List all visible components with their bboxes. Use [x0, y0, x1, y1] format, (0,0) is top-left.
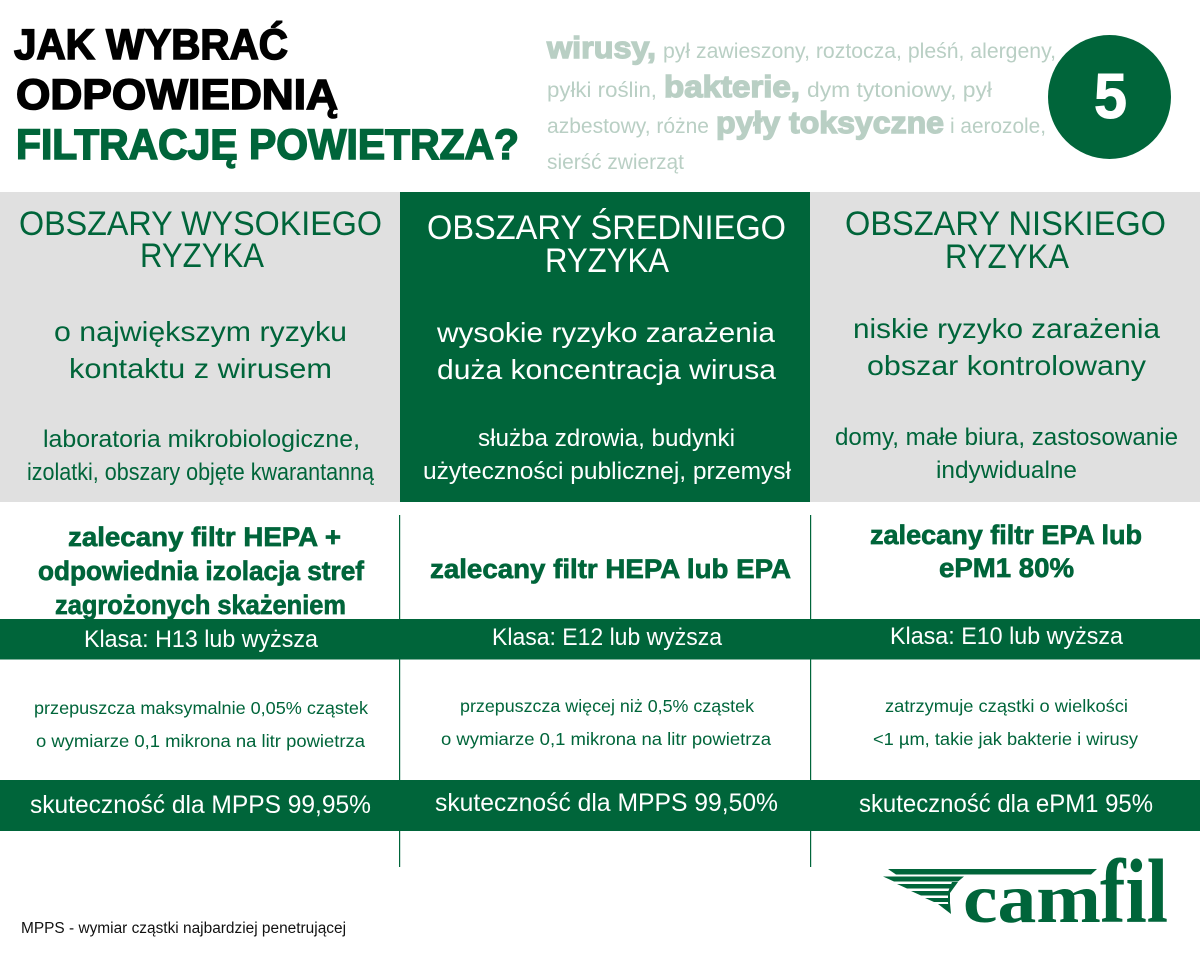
recommendation: high risk filter: zalecany filtr HEPA + [68, 522, 341, 552]
text: low risk filter properties: zatrzymuje cząstki o wielkości [885, 696, 1128, 716]
logo wordmark: cam [963, 861, 1101, 938]
recommendation: low risk filter: zalecany filtr EPA lub [870, 520, 1142, 550]
footnote: MPPS - wymiar cząstki najbardziej penetrującej [21, 920, 346, 937]
heading: medium risk [427, 208, 786, 280]
band: filter efficiency: skuteczność dla ePM1 95% [859, 790, 1153, 818]
text: low risk locations: indywidualne [936, 457, 1077, 484]
heading: medium risk: RYZYKA [545, 242, 669, 280]
recommendation: high risk filter [38, 522, 365, 620]
band: filter classes: Klasa: E12 lub wyższa [492, 624, 723, 651]
text: medium risk filter properties: przepuszcza więcej niż 0,5% cząstek [460, 696, 754, 716]
heading: low risk: OBSZARY NISKIEGO [845, 205, 1166, 243]
text: high risk locations: laboratoria mikrobiologiczne, [43, 426, 360, 453]
text: high risk locations: izolatki, obszary objęte kwarantanną [27, 459, 375, 486]
band: filter efficiency: skuteczność dla MPPS 99,50% [435, 789, 778, 817]
text block: airborne pollutants: pyłki roślin, [547, 79, 657, 102]
text: medium risk locations: służba zdrowia, budynki [478, 425, 735, 452]
band: filter classes: Klasa: H13 lub wyższa [84, 626, 319, 653]
text block: airborne pollutants: bakterie, [664, 69, 800, 104]
text: medium risk description: duża koncentracja wirusa [437, 354, 776, 385]
panel: medium risk areas [400, 192, 810, 502]
badge: number 5: 5 [1094, 60, 1127, 132]
text block: airborne pollutants: wirusy, [546, 30, 656, 65]
text: low risk description: niskie ryzyko zarażenia [853, 313, 1160, 344]
logo: camfil [883, 841, 1168, 942]
heading: high risk: OBSZARY WYSOKIEGO [19, 205, 382, 243]
panel: low risk areas [810, 192, 1200, 502]
text block: airborne pollutants: i aerozole, [950, 115, 1046, 138]
text: high risk filter properties: o wymiarze 0,1 mikrona na litr powietrza [36, 731, 365, 751]
text block: airborne pollutants [546, 30, 1056, 174]
text block: airborne pollutants: azbestowy, różne [547, 115, 709, 138]
recommendation: low risk filter: ePM1 80% [939, 553, 1074, 583]
text: high risk description: o największym ryzyku [54, 316, 347, 347]
title: ODPOWIEDNIĄ [16, 71, 338, 119]
heading: high risk: RYZYKA [140, 237, 264, 275]
text block: airborne pollutants: sierść zwierząt [547, 151, 684, 174]
band: filter efficiency: skuteczność dla MPPS 99,95% [30, 791, 371, 819]
title [14, 20, 519, 169]
text: high risk filter properties: przepuszcza maksymalnie 0,05% cząstek [34, 698, 368, 718]
text: high risk locations [27, 426, 375, 486]
text: medium risk description: wysokie ryzyko zarażenia [436, 317, 775, 348]
text: medium risk locations: użyteczności publicznej, przemysł [423, 458, 792, 485]
band: filter efficiency [0, 780, 1200, 831]
band: filter classes [0, 619, 1200, 660]
text block: airborne pollutants: dym tytoniowy, pył [807, 79, 992, 102]
text: low risk locations: domy, małe biura, zastosowanie [835, 424, 1178, 451]
title: FILTRACJĘ POWIETRZA? [16, 121, 519, 169]
heading: medium risk: OBSZARY ŚREDNIEGO [427, 208, 786, 247]
heading: high risk [19, 205, 382, 275]
panel: high risk areas [0, 192, 400, 502]
heading: low risk [845, 205, 1166, 276]
text: medium risk filter properties: o wymiarze 0,1 mikrona na litr powietrza [441, 729, 771, 749]
band: filter classes: Klasa: E10 lub wyższa [890, 623, 1124, 650]
text block: airborne pollutants: pyły toksyczne [716, 105, 944, 140]
heading: low risk: RYZYKA [945, 238, 1069, 276]
text: high risk filter properties [34, 698, 368, 751]
text: medium risk description [436, 317, 776, 385]
text: low risk filter properties: <1 µm, takie jak bakterie i wirusy [873, 729, 1138, 749]
recommendation: high risk filter: odpowiednia izolacja stref [38, 556, 365, 586]
text: medium risk filter properties [441, 696, 771, 749]
badge: number 5 [1048, 35, 1171, 159]
text: high risk description [54, 316, 347, 384]
text: high risk description: kontaktu z wirusem [69, 353, 332, 384]
text: medium risk locations [423, 425, 792, 485]
text block: airborne pollutants: pył zawieszony, roztocza, pleśń, alergeny, [663, 40, 1056, 63]
text: low risk description [853, 313, 1160, 381]
logo: camfil: fil [1100, 841, 1168, 942]
text: low risk description: obszar kontrolowany [867, 350, 1146, 381]
text: low risk locations [835, 424, 1178, 484]
title: JAK WYBRAĆ [14, 20, 288, 69]
recommendation: medium risk filter: zalecany filtr HEPA lub EPA [430, 554, 791, 584]
recommendation: high risk filter: zagrożonych skażeniem [55, 590, 346, 620]
recommendation: low risk filter [870, 520, 1142, 583]
text: low risk filter properties [873, 696, 1138, 749]
icon: logo wing [883, 869, 1097, 914]
